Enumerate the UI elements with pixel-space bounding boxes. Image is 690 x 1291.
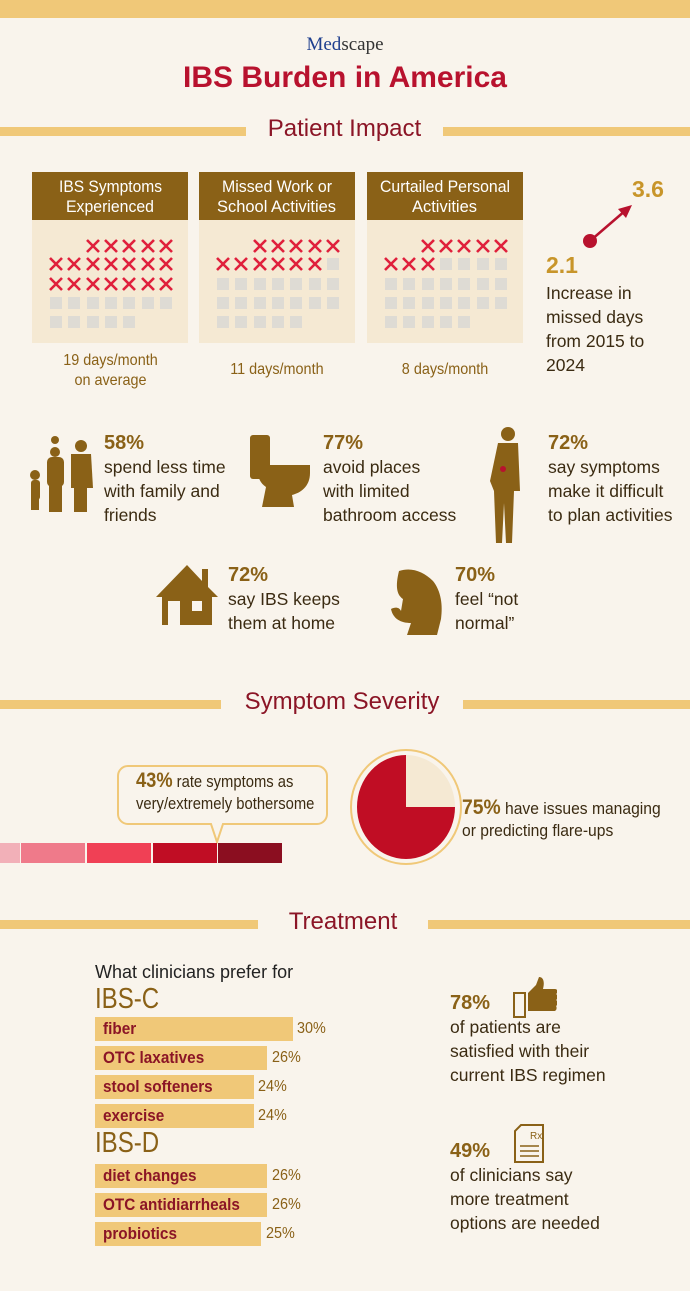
stat: 72% plan activities: say symptoms <box>548 457 660 477</box>
stat: 2.1 increase: missed days <box>546 307 643 327</box>
stat: 2.1 increase: Increase in <box>546 283 632 303</box>
stat: 2.1 increase: from 2015 to <box>546 331 644 351</box>
bar chart: clinician preferences: What clinicians prefer for <box>95 962 293 982</box>
panel: IBS symptoms calendar: Experienced <box>66 197 154 216</box>
stat: 75% flare-ups: or predicting flare-ups <box>462 821 613 840</box>
stat: 2.1 increase: 2024 <box>546 355 585 375</box>
panel: curtailed activities calendar: Curtailed Personal <box>380 177 510 196</box>
severity scale bar <box>0 843 282 863</box>
stat: 77% bathroom: bathroom access <box>323 505 456 525</box>
section header: Patient Impact: Patient Impact <box>268 115 421 142</box>
stat: 75% flare-ups <box>462 796 661 840</box>
panel: IBS symptoms calendar <box>32 172 188 389</box>
stat: 78% satisfied: current IBS regimen <box>450 1065 606 1085</box>
bar chart: clinician preferences <box>95 962 326 1246</box>
panel: curtailed activities calendar: 8 days/month <box>402 361 488 378</box>
stat: 49% more options: 49% <box>450 1140 490 1162</box>
stat: 49% more options: options are needed <box>450 1213 600 1233</box>
section header: Treatment <box>0 908 690 935</box>
icon: thumbs up <box>513 977 557 1018</box>
bar chart: clinician preferences: 25% <box>266 1225 295 1242</box>
top band <box>0 0 690 18</box>
panel: missed work calendar: Missed Work or <box>222 177 332 196</box>
bar chart: clinician preferences: 24% <box>258 1107 287 1124</box>
stat: 72% plan activities: 72% <box>548 432 588 454</box>
stat: 77% bathroom: 77% <box>323 432 363 454</box>
section header: Treatment: Treatment <box>289 908 397 935</box>
bar chart: clinician preferences: OTC laxatives <box>103 1048 204 1067</box>
stat: 70% not normal: 70% <box>455 564 495 586</box>
bar chart: clinician preferences: IBS-D <box>95 1127 159 1159</box>
stat: 70% not normal <box>455 564 518 633</box>
stat: 58% family <box>104 432 226 525</box>
bar chart: clinician preferences: 26% <box>272 1167 301 1184</box>
title: IBS Burden in America <box>183 61 507 94</box>
stat: 78% satisfied <box>450 992 606 1085</box>
stat: 58% family: 58% <box>104 432 144 454</box>
stat: 77% bathroom <box>323 432 456 525</box>
bar chart: clinician preferences: stool softeners <box>103 1077 213 1096</box>
panel: missed work calendar: School Activities <box>217 197 336 216</box>
stat: 49% more options: of clinicians say <box>450 1165 573 1185</box>
icon: family <box>30 436 93 512</box>
bar chart: clinician preferences: fiber <box>103 1019 136 1038</box>
stat: 72% home: say IBS keeps <box>228 589 340 609</box>
stat: 78% satisfied: 78% <box>450 992 490 1014</box>
panel: IBS symptoms calendar: 19 days/month <box>63 352 157 369</box>
bar chart: clinician preferences: OTC antidiarrheals <box>103 1195 240 1214</box>
bar chart: clinician preferences: probiotics <box>103 1224 177 1243</box>
panel: missed work calendar: 11 days/month <box>230 361 324 378</box>
pie chart: 75% <box>350 749 462 865</box>
section header: Symptom Severity: Symptom Severity <box>245 688 439 715</box>
stat: 72% plan activities <box>548 432 673 525</box>
bar chart: clinician preferences: exercise <box>103 1106 164 1125</box>
callout: 43% bothersome: 43% rate symptoms as <box>136 769 293 792</box>
stat: 75% flare-ups: 75% have issues managing <box>462 796 661 819</box>
stat: 72% plan activities: to plan activities <box>548 505 673 525</box>
icon: person with stomach pain <box>490 427 520 543</box>
stat: 2.1 increase: 2.1 <box>546 252 578 278</box>
panel: missed work calendar <box>199 172 355 378</box>
stat: 77% bathroom: avoid places <box>323 457 420 477</box>
callout: 43% bothersome: very/extremely bothersome <box>136 794 314 813</box>
panel: IBS symptoms calendar: IBS Symptoms <box>59 177 162 196</box>
stat: 72% plan activities: make it difficult <box>548 481 663 501</box>
icon: prescription: Rx <box>530 1131 542 1142</box>
stat: 3.6: 3.6 <box>632 176 664 202</box>
bar chart: clinician preferences: 30% <box>297 1020 326 1037</box>
bar chart: clinician preferences: diet changes <box>103 1166 197 1185</box>
stat: 78% satisfied: satisfied with their <box>450 1041 589 1061</box>
stat: 49% more options: more treatment <box>450 1189 569 1209</box>
stat: 49% more options <box>450 1140 600 1233</box>
stat: 72% home <box>228 564 340 633</box>
stat: 72% home: 72% <box>228 564 268 586</box>
icon: toilet <box>250 435 310 507</box>
stat: 58% family: with family and <box>104 481 220 501</box>
section header: Patient Impact <box>0 115 690 142</box>
stat: 58% family: spend less time <box>104 457 226 477</box>
bar chart: clinician preferences: 24% <box>258 1078 287 1095</box>
bar chart: clinician preferences: 26% <box>272 1196 301 1213</box>
icon: house <box>156 565 218 625</box>
icon: distressed person <box>391 570 442 635</box>
stat: 58% family: friends <box>104 505 157 525</box>
panel: IBS symptoms calendar: on average <box>74 372 146 389</box>
callout: 43% bothersome <box>117 765 328 844</box>
icon: prescription <box>514 1124 544 1163</box>
stat: 2.1 increase <box>546 252 644 375</box>
stat: 77% bathroom: with limited <box>323 481 410 501</box>
arrow: missed days increase <box>583 205 632 248</box>
stat: 70% not normal: normal” <box>455 613 514 633</box>
stat: 72% home: them at home <box>228 613 335 633</box>
bar chart: clinician preferences: IBS-C <box>95 983 159 1015</box>
stat: 78% satisfied: of patients are <box>450 1017 561 1037</box>
panel: curtailed activities calendar: Activities <box>412 197 477 216</box>
panel: curtailed activities calendar <box>367 172 523 378</box>
section header: Symptom Severity <box>0 688 690 715</box>
logo: Medscape: Medscape <box>306 34 384 55</box>
stat: 70% not normal: feel “not <box>455 589 518 609</box>
bar chart: clinician preferences: 26% <box>272 1049 301 1066</box>
